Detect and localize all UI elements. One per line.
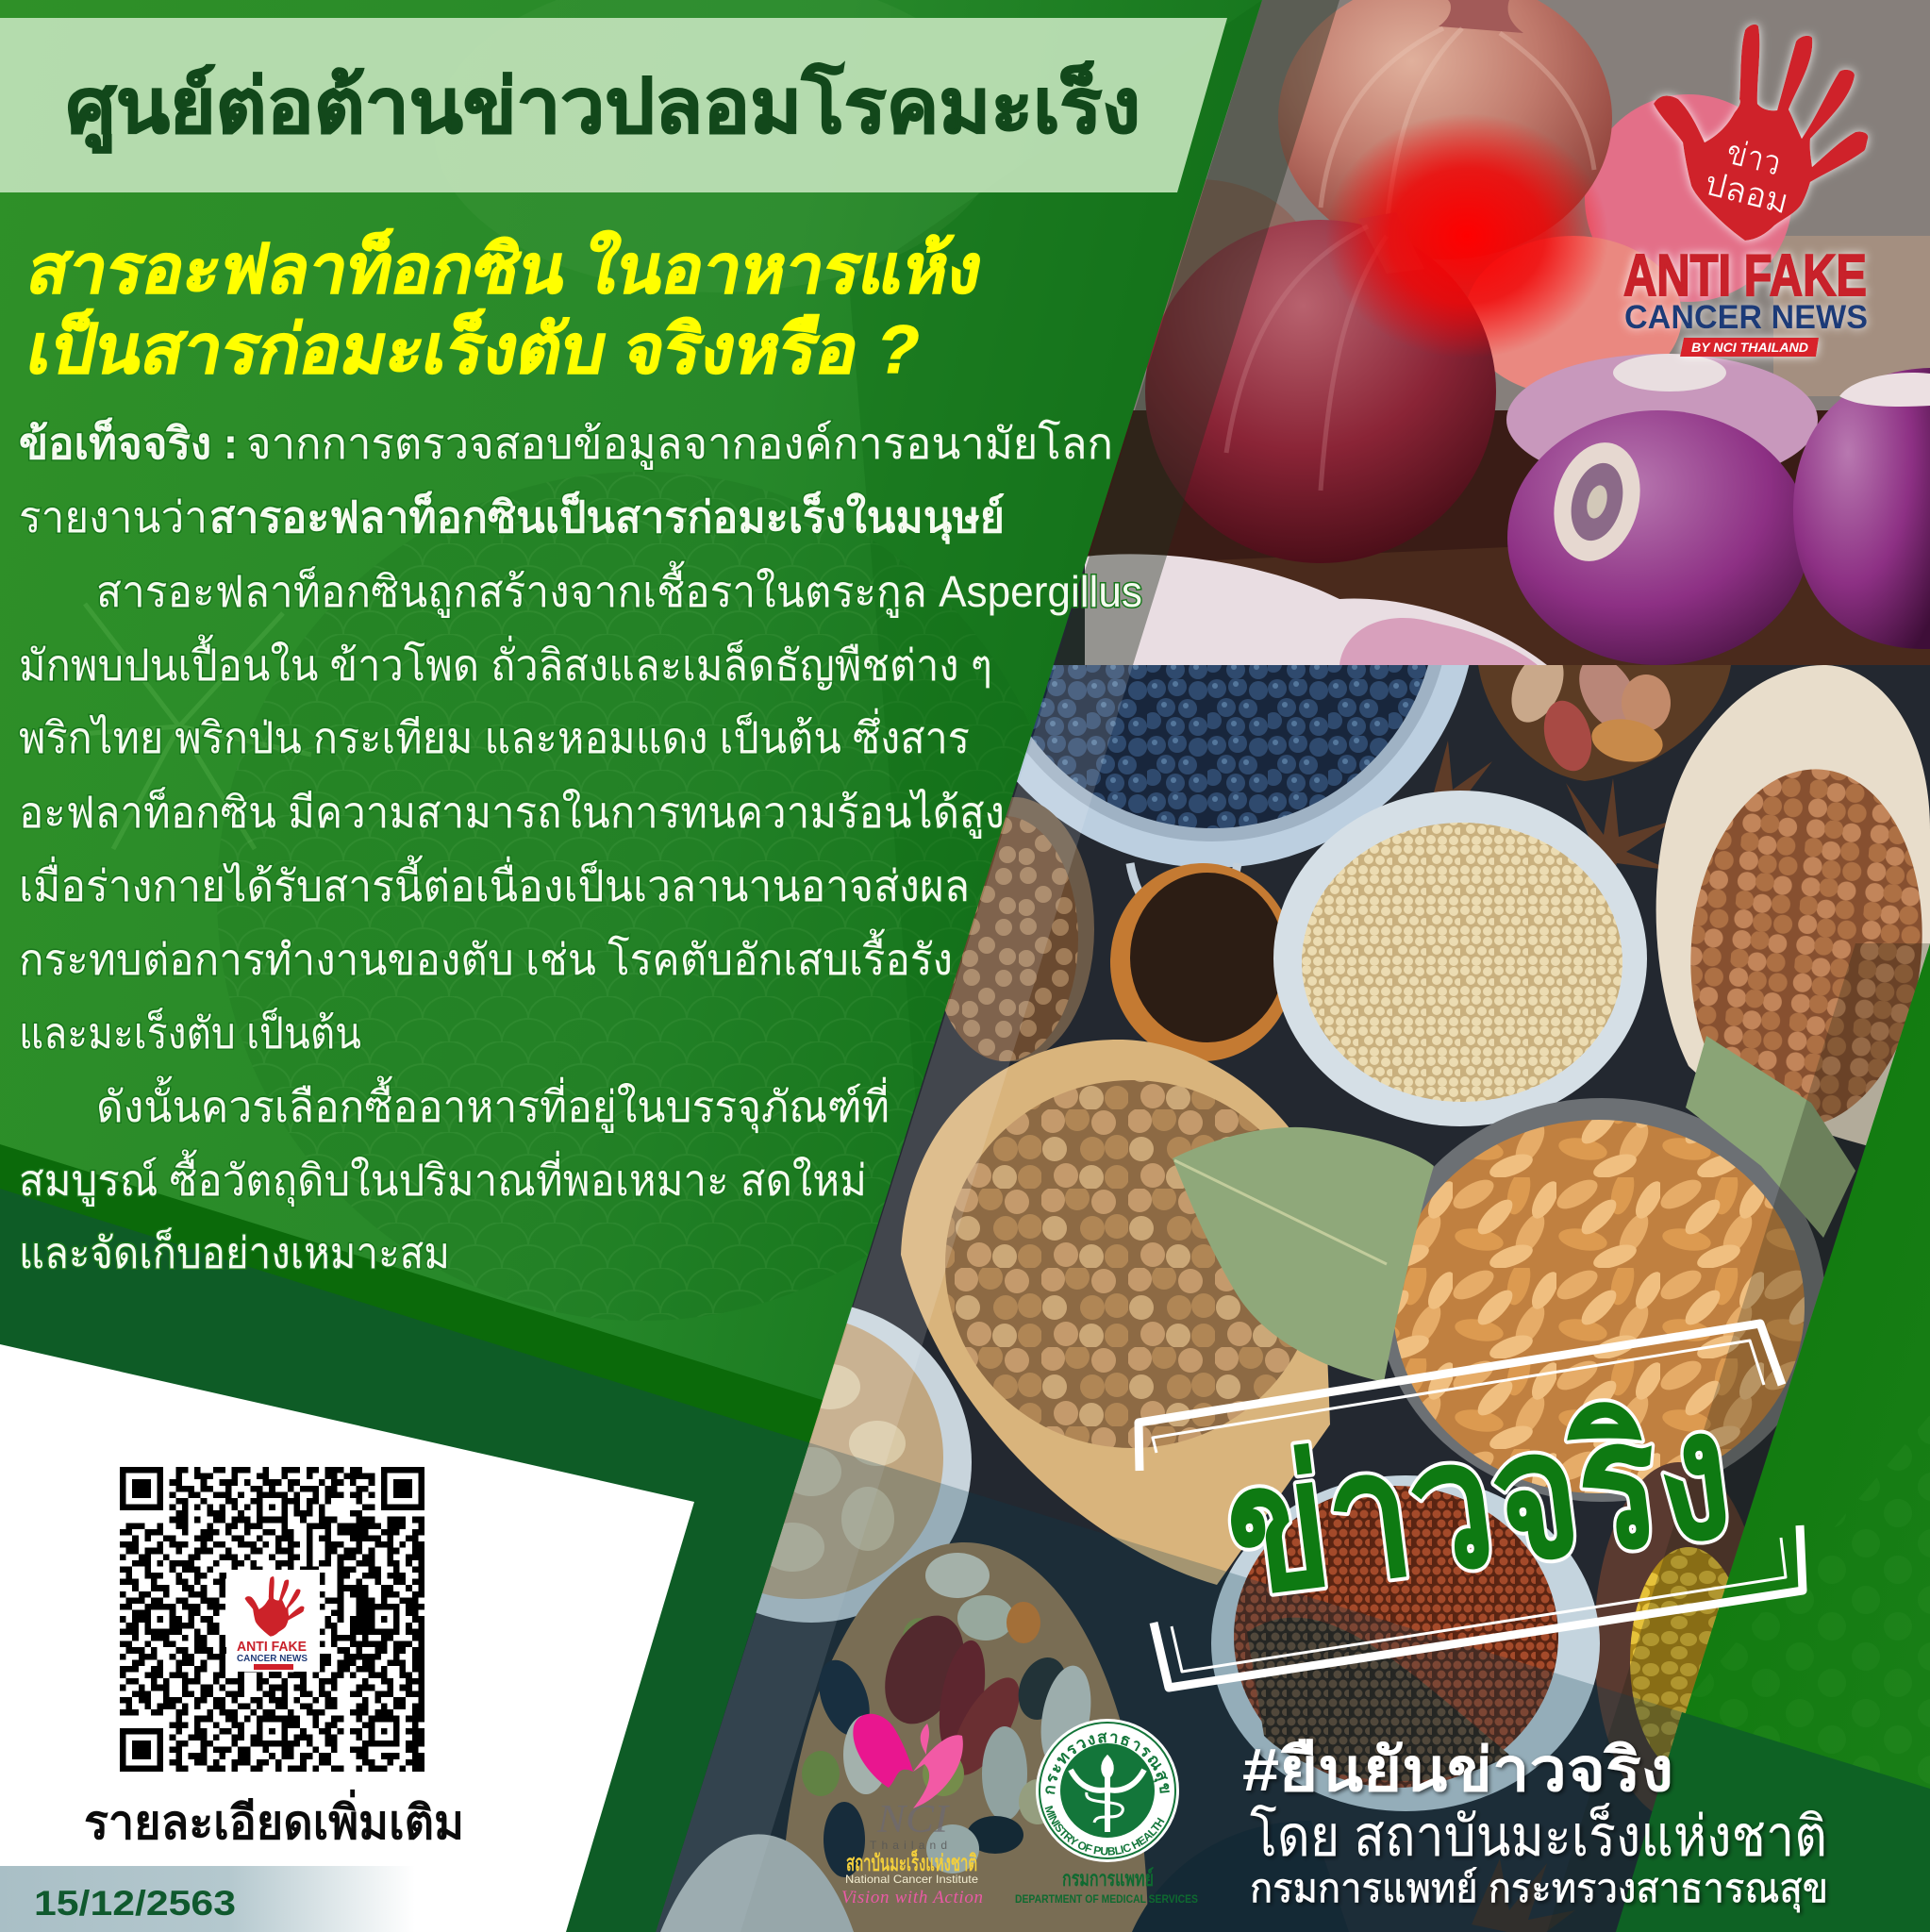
photo: mixed bean plate xyxy=(660,1542,1148,1932)
photo: cream spoon with lentils xyxy=(1656,665,1930,1160)
photo: onions xyxy=(1085,0,1930,665)
text block: fact body: สมบูรณ์ ซื้อวัตถุดิบในปริมาณที่พอเหมาะ สดใหม่ xyxy=(19,1149,867,1208)
photo: translucent strip over onions xyxy=(1056,0,1339,665)
icon: red hand: ข่าว xyxy=(1722,132,1785,183)
photo: lower spice xyxy=(1132,1858,1575,1932)
text block: fact body: สารอะฟลาท็อกซินถูกสร้างจากเชื้อราในตระกูล Aspergillus xyxy=(96,560,1142,618)
photo: star anise xyxy=(1434,741,1666,869)
logo: Ministry of Public Health seal xyxy=(1015,1719,1198,1906)
heading: question: สารอะฟลาท็อกซิน ในอาหารแห้ง xyxy=(22,228,990,308)
credit: verified by xyxy=(1242,1736,1828,1913)
stamp: true news: ข่าวจริง xyxy=(1216,1374,1741,1633)
wordmark xyxy=(1623,243,1868,357)
icon: red hand xyxy=(1654,25,1868,241)
photo: teal tint over lower photo xyxy=(656,1442,1682,1932)
stamp: true news xyxy=(1139,1324,1803,1688)
date band xyxy=(0,1866,415,1932)
NCI Thailand wordmark xyxy=(841,1798,983,1907)
photo: quinoa bowl xyxy=(1273,791,1647,1126)
text block: fact body: รายงานว่า xyxy=(19,492,208,541)
QR code xyxy=(120,1467,424,1772)
logo: Ministry of Public Health seal: MINISTRY OF PUBLIC HEALTH xyxy=(1045,1806,1164,1856)
credit: verified by: โดย สถาบันมะเร็งแห่งชาติ xyxy=(1250,1803,1827,1868)
text block: fact body: มักพบปนเปื้อนใน ข้าวโพด ถั่วลิสงและเมล็ดธัญพืชต่าง ๆ xyxy=(19,634,992,690)
text block: fact body xyxy=(19,417,1142,1277)
wordmark: ANTI FAKE xyxy=(1623,243,1867,308)
photo: translucent strip over grains xyxy=(656,665,1133,1932)
QR centre logo: ANTI FAKE xyxy=(237,1639,307,1655)
NCI Thailand wordmark: Thailand xyxy=(870,1839,947,1852)
text block: fact body: เมื่อร่างกายได้รับสารนี้ต่อเนื่องเป็นเวลานานอาจส่งผล xyxy=(19,855,970,910)
photo: wooden spoon with lentils xyxy=(901,1040,1330,1585)
photo: lower food spread xyxy=(660,665,1930,1932)
caption: more details: รายละเอียดเพิ่มเติม xyxy=(84,1790,464,1849)
photo: corn dish xyxy=(1596,1462,1745,1811)
NCI Thailand wordmark: สถาบันมะเร็งแห่งชาติ xyxy=(846,1849,977,1876)
icon: caduceus xyxy=(1071,1757,1144,1832)
text block: fact body: กระทบต่อการทำงานของตับ เช่น โรคตับอักเสบเรื้อรัง xyxy=(19,928,953,984)
date: 15/12/2563 xyxy=(34,1884,236,1923)
logo: Anti Fake Cancer News xyxy=(1623,25,1868,357)
QR centre logo xyxy=(226,1570,320,1672)
photo: bean bowl xyxy=(757,1307,972,1623)
title: ศูนย์ต่อต้านข่าวปลอมโรคมะเร็ง xyxy=(66,60,1140,154)
NCI Thailand wordmark: NCI xyxy=(876,1798,950,1841)
QR centre logo: CANCER NEWS xyxy=(237,1654,308,1664)
text block: fact body: อะฟลาท็อกซิน มีความสามารถในการทนความร้อนได้สูง xyxy=(19,787,1005,839)
photo: blue lentil bowl xyxy=(1017,665,1470,894)
text block: fact body: สารอะฟลาท็อกซินเป็นสารก่อมะเร็งในมนุษย์ xyxy=(209,491,1005,544)
panel: green left background xyxy=(0,0,1262,1932)
icon: pink heart xyxy=(853,1714,963,1808)
NCI Thailand wordmark: Vision with Action xyxy=(841,1888,983,1907)
wordmark: BY NCI THAILAND xyxy=(1691,340,1808,355)
text block: fact body: ดังนั้นควรเลือกซื้ออาหารที่อยู่ในบรรจุภัณฑ์ที่ xyxy=(96,1075,890,1134)
logo: Ministry of Public Health seal: DEPARTMENT OF MEDICAL SERVICES xyxy=(1015,1892,1198,1906)
wordmark: CANCER NEWS xyxy=(1624,299,1868,336)
photo: dried orange slice xyxy=(1110,863,1295,1061)
photo: small spoon lentils xyxy=(931,797,1094,1061)
panel: QR white card xyxy=(0,1344,694,1932)
heading: question xyxy=(22,228,990,388)
text block: fact body: ข้อเท็จจริง : xyxy=(19,417,238,468)
credit: verified by: กรมการแพทย์ กระทรวงสาธารณสุข xyxy=(1250,1866,1828,1913)
department text: กรมการแพทย์ xyxy=(1062,1867,1154,1890)
photo: background table xyxy=(656,0,1930,1932)
title banner xyxy=(0,18,1227,192)
logo: National Cancer Institute xyxy=(841,1714,983,1907)
text block: fact body: และมะเร็งตับ เป็นต้น xyxy=(19,1008,361,1058)
NCI Thailand wordmark: National Cancer Institute xyxy=(845,1873,978,1886)
icon: red hand: ปลอม xyxy=(1701,163,1792,222)
text block: fact body: จากการตรวจสอบข้อมูลจากองค์การอนามัยโลก xyxy=(246,419,1113,470)
photo: wheat bowl xyxy=(1378,1098,1825,1502)
photo: bean dish xyxy=(1478,665,1731,781)
text block: fact body: พริกไทย พริกป่น กระเทียม และหอมแดง เป็นต้น ซึ่งสาร xyxy=(19,708,970,762)
heading: question: เป็นสารก่อมะเร็งตับ จริงหรือ ? xyxy=(22,308,927,388)
text block: fact body: และจัดเก็บอย่างเหมาะสม xyxy=(19,1227,450,1277)
logo: Ministry of Public Health seal: กระทรวงสาธารณสุข xyxy=(1045,1732,1170,1794)
photo: translucent strip at right xyxy=(1547,943,1930,1932)
credit: verified by: #ยืนยันข่าวจริง xyxy=(1242,1736,1673,1804)
panel: green right triangle xyxy=(1616,943,1930,1932)
photo: red grain bowl xyxy=(1211,1475,1600,1811)
photo: bay leaves xyxy=(1173,1036,1855,1382)
